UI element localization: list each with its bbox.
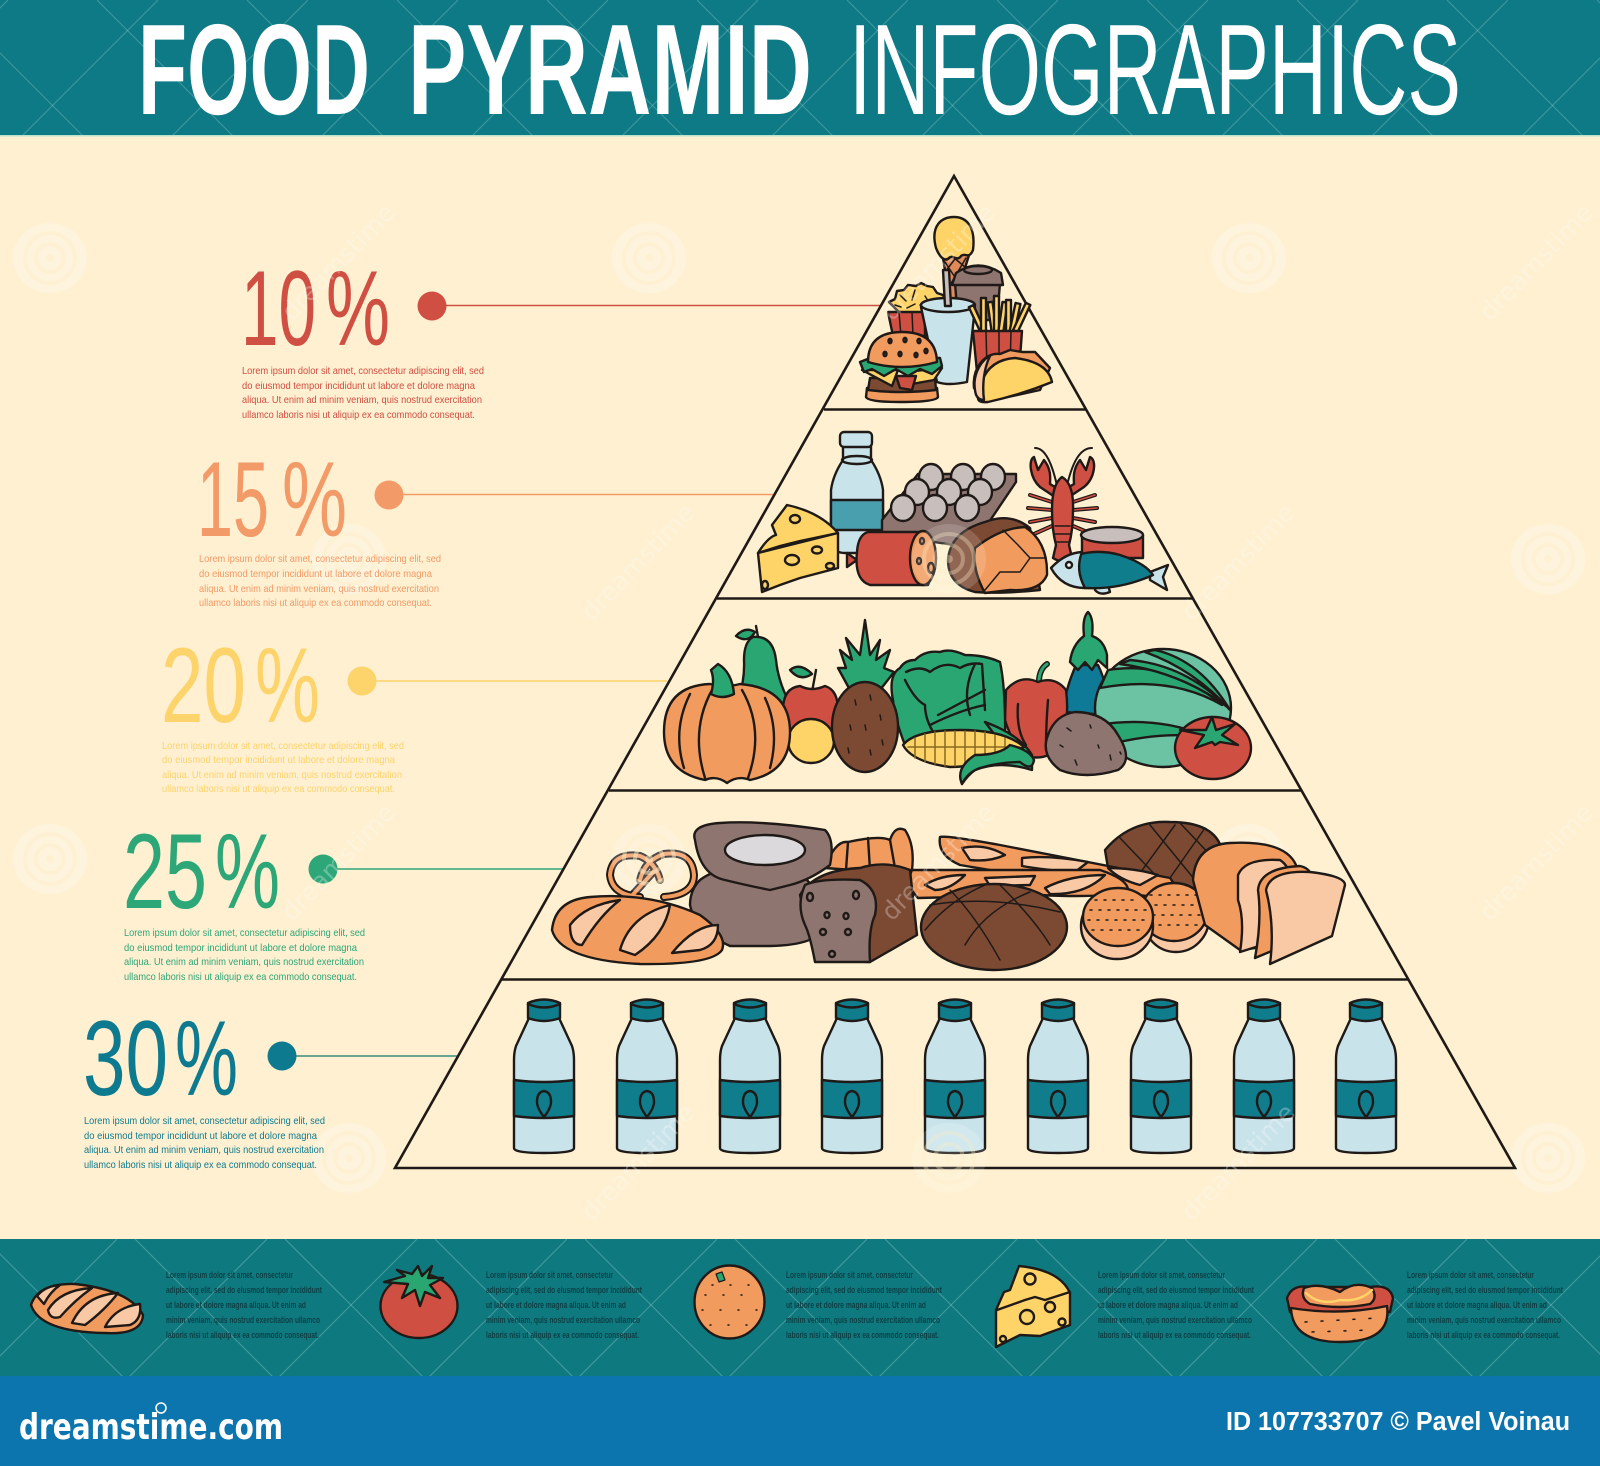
watermark overlays: dreamstime xyxy=(275,198,401,326)
callout: 15%: ullamco laboris nisi ut aliquip ex ea commodo consequat. xyxy=(199,598,432,609)
icon: salami xyxy=(847,531,936,585)
callout: 30%: Lorem ipsum dolor sit amet, consectetur adipiscing elit, sed xyxy=(84,1116,325,1127)
tier: treats and fast food xyxy=(860,217,1052,402)
icon: fish xyxy=(1051,552,1168,594)
callout: 15%: do eiusmod tempor incididunt ut labore et dolore magna xyxy=(199,569,432,580)
watermark overlays: dreamstime xyxy=(575,498,701,626)
icon: tomato xyxy=(1175,717,1251,779)
icon: round dark loaf xyxy=(921,884,1067,970)
icon: orange xyxy=(694,1266,764,1338)
callout: 15%: % xyxy=(282,439,347,559)
text: bottom column 1 xyxy=(166,1270,323,1341)
icon: water bottle 9 xyxy=(1336,1000,1396,1153)
tier: dairy, eggs, meat and seafood xyxy=(758,432,1168,594)
icon: pineapple xyxy=(832,620,898,772)
icon: baguette lower xyxy=(910,870,1128,898)
footer logo: dreamstime.com xyxy=(19,1407,283,1448)
icon: water bottle 3 xyxy=(720,1000,780,1153)
icon: water bottle 6 xyxy=(1028,1000,1088,1153)
text: bottom column 2: Lorem ipsum dolor sit amet, consectetur xyxy=(486,1270,613,1281)
icon: water bottle 1 xyxy=(514,1000,574,1153)
watermark overlays: dreamstime xyxy=(875,798,1001,926)
text: bottom column 4: adipiscing elit, sed do eiusmod tempor incididunt xyxy=(1098,1285,1255,1296)
icon: water bottle 8 xyxy=(1234,1000,1294,1153)
callout: 15% xyxy=(197,439,773,609)
callout: 20%: do eiusmod tempor incididunt ut labore et dolore magna xyxy=(162,755,395,766)
callout: 15%: 15 xyxy=(197,439,269,559)
title: FOOD xyxy=(138,0,370,142)
callout: 20%: 20 xyxy=(161,625,246,745)
watermark overlays: dreamstime xyxy=(1473,798,1599,926)
title xyxy=(138,0,1461,142)
icon: taco xyxy=(974,350,1052,402)
text: bottom column 3: Lorem ipsum dolor sit amet, consectetur xyxy=(786,1270,913,1281)
text: bottom column 2 xyxy=(486,1270,643,1341)
callout: 10% xyxy=(241,248,882,421)
text: bottom column 3: minim veniam, quis nostrud exercitation ullamco xyxy=(786,1315,940,1326)
icon: dark loaf back xyxy=(1105,822,1222,890)
watermark overlays: dreamstime xyxy=(1175,1098,1301,1226)
callout: 30%: do eiusmod tempor incididunt ut labore et dolore magna xyxy=(84,1131,317,1142)
icon: cabbage xyxy=(892,651,1005,745)
callout: 20%: % xyxy=(255,625,320,745)
footer bar xyxy=(0,1376,1600,1466)
text: bottom column 4: minim veniam, quis nostrud exercitation ullamco xyxy=(1098,1315,1252,1326)
icon: apple xyxy=(783,667,838,740)
text: bottom column 1: Lorem ipsum dolor sit amet, consectetur xyxy=(166,1270,293,1281)
icon: water bottle 2 xyxy=(617,1000,677,1153)
text: bottom column 3: ut labore et dolore magna aliqua. Ut enim ad xyxy=(786,1300,926,1311)
callout: 10%: ullamco laboris nisi ut aliquip ex ea commodo consequat. xyxy=(242,410,475,421)
watermark overlays: dreamstime xyxy=(575,1098,701,1226)
callout: 25%: 25 xyxy=(123,811,207,931)
text: bottom column 3: laboris nisi ut aliquip ex ea commodo consequat. xyxy=(786,1330,939,1341)
icon: pepper xyxy=(1005,664,1067,758)
icon: burger xyxy=(860,332,942,402)
watermark overlays: dreamstime xyxy=(875,198,1001,326)
text: bottom column 2: minim veniam, quis nostrud exercitation ullamco xyxy=(486,1315,640,1326)
callout: 30%: % xyxy=(175,998,238,1118)
title: PYRAMID xyxy=(408,0,812,142)
icon: ham xyxy=(948,518,1047,593)
callout: 25%: aliqua. Ut enim ad minim veniam, quis nostrud exercitation xyxy=(124,957,364,968)
callout: 20% xyxy=(161,625,667,795)
icon: bun rear xyxy=(1141,883,1209,952)
callout: 10%: aliqua. Ut enim ad minim veniam, quis nostrud exercitation xyxy=(242,395,482,406)
text: bottom column 5: Lorem ipsum dolor sit amet, consectetur xyxy=(1407,1270,1534,1281)
pyramid outline xyxy=(395,176,1515,1168)
icon: watermelon xyxy=(1095,649,1231,767)
icon: water bottle 4 xyxy=(822,1000,882,1153)
callout: 15%: aliqua. Ut enim ad minim veniam, quis nostrud exercitation xyxy=(199,584,439,595)
icon: bread loaf xyxy=(31,1284,143,1333)
watermark spirals xyxy=(13,223,1585,1193)
callout: 20%: aliqua. Ut enim ad minim veniam, quis nostrud exercitation xyxy=(162,770,402,781)
icon: bun front xyxy=(1081,888,1153,959)
text: bottom column 5 xyxy=(1407,1270,1564,1341)
callout: 15%: Lorem ipsum dolor sit amet, consectetur adipiscing elit, sed xyxy=(199,554,441,565)
icon: coffee cup xyxy=(952,266,1003,320)
text: bottom column 3 xyxy=(786,1270,943,1341)
text: bottom column 3: adipiscing elit, sed do eiusmod tempor incididunt xyxy=(786,1285,943,1296)
callout: 20%: Lorem ipsum dolor sit amet, consectetur adipiscing elit, sed xyxy=(162,741,404,752)
callout: 30%: 30 xyxy=(83,998,168,1118)
callout: 10%: 10 xyxy=(241,248,316,368)
icon: ice cream xyxy=(934,217,974,300)
callout: 25% xyxy=(123,811,564,983)
text: bottom column 4: Lorem ipsum dolor sit amet, consectetur xyxy=(1098,1270,1225,1281)
text: bottom column 4: ut labore et dolore magna aliqua. Ut enim ad xyxy=(1098,1300,1238,1311)
text: bottom column 1: laboris nisi ut aliquip ex ea commodo consequat. xyxy=(166,1330,319,1341)
text: bottom column 2: ut labore et dolore magna aliqua. Ut enim ad xyxy=(486,1300,626,1311)
text: bottom column 1: ut labore et dolore magna aliqua. Ut enim ad xyxy=(166,1300,306,1311)
icon: pumpkin xyxy=(664,664,790,783)
watermark overlays: dreamstime xyxy=(275,798,401,926)
text: bottom column 4: laboris nisi ut aliquip ex ea commodo consequat. xyxy=(1098,1330,1251,1341)
bottom teal band xyxy=(0,1239,1600,1376)
text: bottom column 1: minim veniam, quis nostrud exercitation ullamco xyxy=(166,1315,320,1326)
icon: sliced bread xyxy=(1193,843,1345,964)
callout: 30%: aliqua. Ut enim ad minim veniam, quis nostrud exercitation xyxy=(84,1145,324,1156)
callout: 30%: ullamco laboris nisi ut aliquip ex ea commodo consequat. xyxy=(84,1160,317,1171)
icon: popcorn xyxy=(888,283,946,336)
icon: milk bottle xyxy=(831,432,883,553)
footer credit: ID 107733707 © Pavel Voinau xyxy=(1226,1408,1570,1436)
icon: egg tray xyxy=(882,464,1016,546)
text: bottom column 2: adipiscing elit, sed do eiusmod tempor incididunt xyxy=(486,1285,643,1296)
watermark overlays xyxy=(275,198,1599,1226)
text: bottom column 1: adipiscing elit, sed do eiusmod tempor incididunt xyxy=(166,1285,323,1296)
icon: water bottle 7 xyxy=(1131,1000,1191,1153)
callout: 20%: ullamco laboris nisi ut aliquip ex ea commodo consequat. xyxy=(162,784,395,795)
callout: 10%: Lorem ipsum dolor sit amet, consectetur adipiscing elit, sed xyxy=(242,366,484,377)
icon: cheese xyxy=(996,1266,1070,1347)
callout: 10%: do eiusmod tempor incididunt ut labore et dolore magna xyxy=(242,381,475,392)
callout: 25%: ullamco laboris nisi ut aliquip ex ea commodo consequat. xyxy=(124,972,357,983)
icon: lobster xyxy=(1028,448,1097,561)
icon: yellow fruit xyxy=(788,719,834,763)
header band xyxy=(0,0,1600,136)
icon: water bottle 5 xyxy=(925,1000,985,1153)
icon: potato xyxy=(1046,712,1126,775)
callout: 25%: % xyxy=(215,811,280,931)
tier: bread and grains xyxy=(552,822,1345,970)
callout: 10%: % xyxy=(326,248,390,368)
watermark overlays: dreamstime xyxy=(1175,498,1301,626)
icon: croissant xyxy=(825,829,913,872)
icon: pretzel xyxy=(610,853,694,900)
icon: brown bread loaf xyxy=(800,864,917,962)
icon: eggplant xyxy=(1063,612,1108,715)
icon: hot dog xyxy=(1287,1285,1393,1342)
icon: pear xyxy=(736,626,788,720)
text: bottom column 4 xyxy=(1098,1270,1255,1341)
text: bottom column 2: laboris nisi ut aliquip ex ea commodo consequat. xyxy=(486,1330,639,1341)
icon: left bread loaf xyxy=(552,896,723,964)
watermark overlays: dreamstime xyxy=(1473,198,1599,326)
icon: tin can xyxy=(1081,527,1143,558)
icon: french fries xyxy=(969,296,1030,372)
icon: flour sack xyxy=(690,822,832,946)
callout: 25%: do eiusmod tempor incididunt ut labore et dolore magna xyxy=(124,943,357,954)
tier: vegetables and fruit xyxy=(664,612,1251,784)
callout: 30% xyxy=(83,998,458,1171)
icon: baguette upper xyxy=(940,837,1175,900)
icon: cheese wedge xyxy=(758,505,838,592)
icon: tomato xyxy=(380,1266,458,1338)
icon: soda cup xyxy=(921,270,975,384)
tier: water bottles xyxy=(514,1000,1396,1153)
icon: corn xyxy=(903,722,1034,784)
callout: 25%: Lorem ipsum dolor sit amet, consectetur adipiscing elit, sed xyxy=(124,928,365,939)
